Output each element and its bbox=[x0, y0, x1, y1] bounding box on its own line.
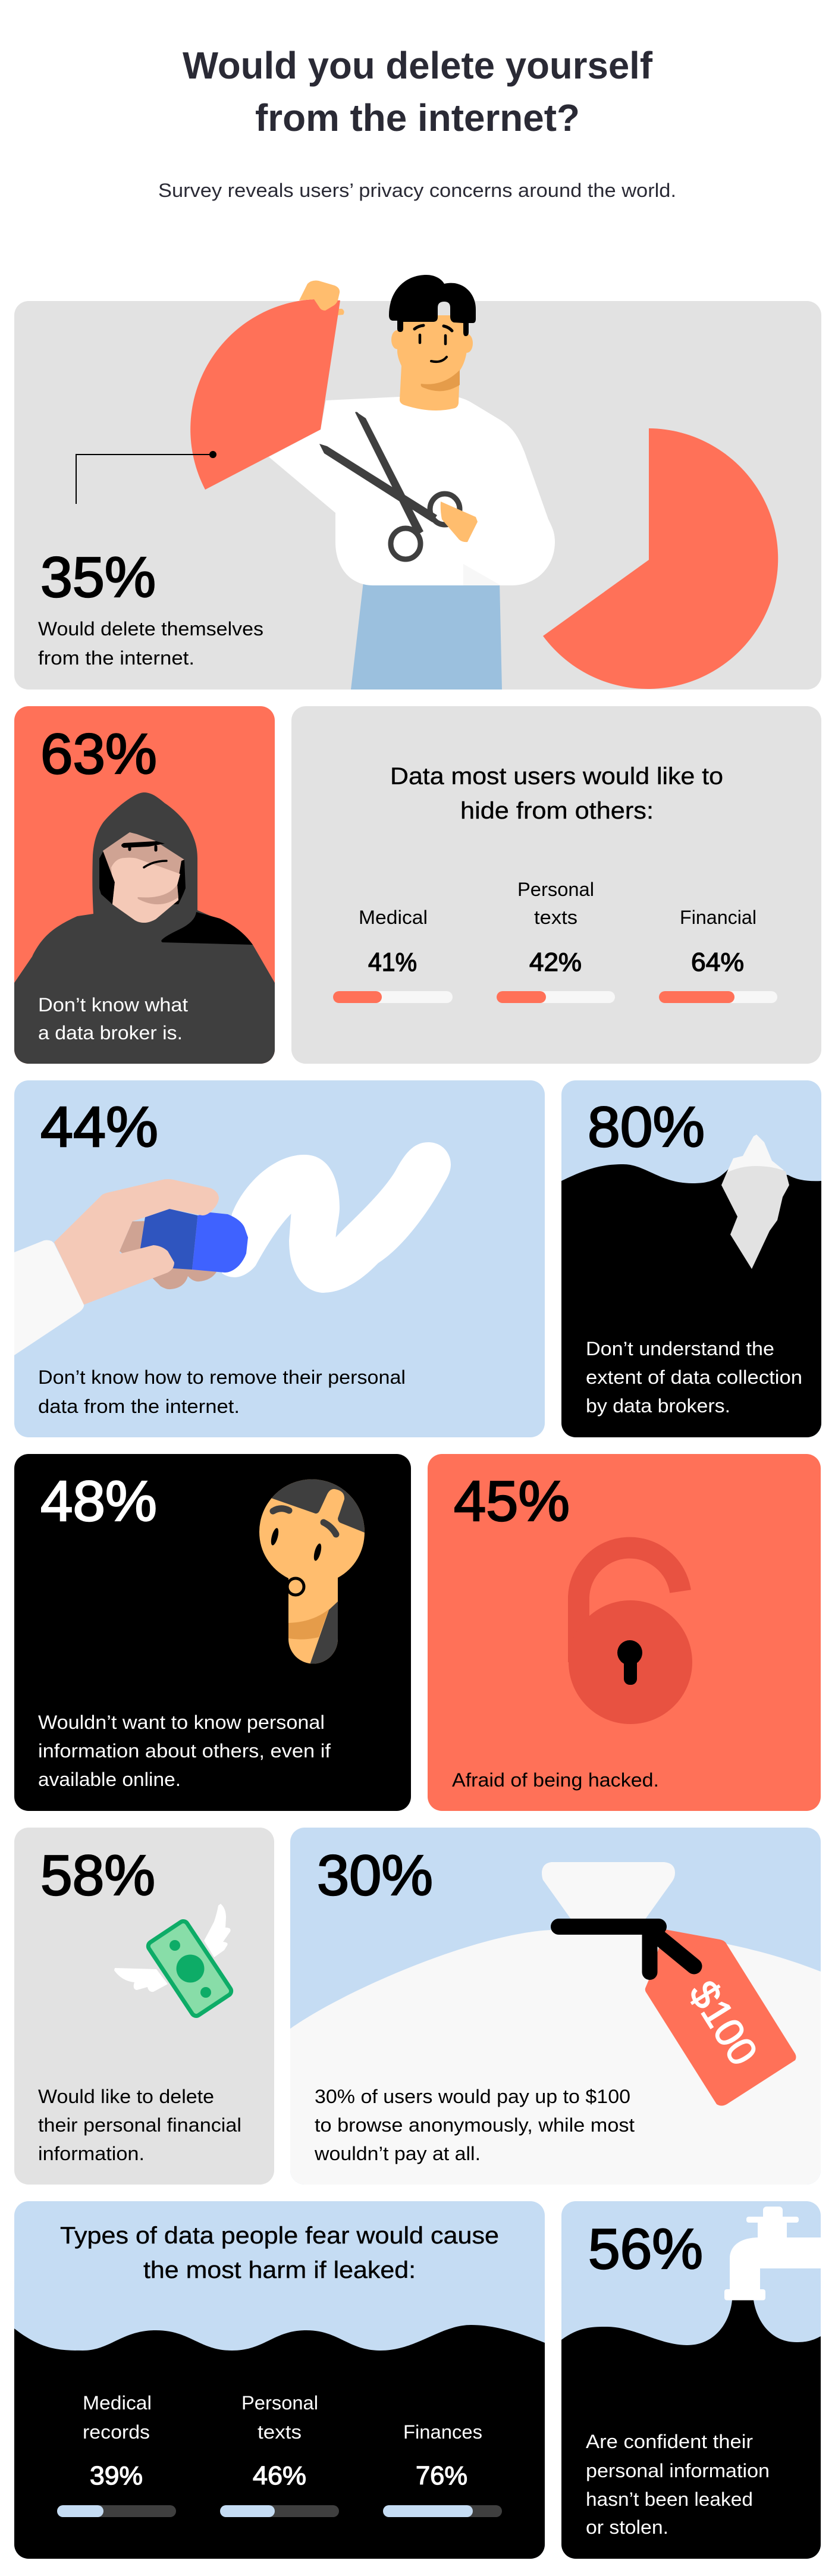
panel: 44% remove data bbox=[14, 1080, 545, 1437]
panel: 56% confident bbox=[561, 2201, 821, 2559]
stat 48%: 48% bbox=[40, 1469, 157, 1533]
bar: personal texts 46%: 46% bbox=[253, 2461, 306, 2490]
bar: personal texts 42%: Personal bbox=[517, 879, 594, 900]
bar: medical 41%: Medical bbox=[359, 907, 428, 928]
panel heading: Types of data people fear would cause bbox=[60, 2223, 499, 2249]
panel heading bbox=[390, 763, 723, 824]
stat 80%: 80% bbox=[588, 1095, 705, 1159]
panel: 48% personal information bbox=[14, 1454, 411, 1811]
stat text: Are confident their bbox=[586, 2431, 753, 2452]
stat text: Afraid of being hacked. bbox=[452, 1769, 659, 1791]
stat text: their personal financial bbox=[38, 2114, 241, 2136]
stat text bbox=[586, 1338, 802, 1417]
bar: personal texts 42%: 42% bbox=[529, 948, 582, 977]
stat text: a data broker is. bbox=[38, 1022, 183, 1043]
faucet bbox=[724, 2207, 821, 2300]
stat text: information. bbox=[38, 2143, 145, 2164]
stat text: Wouldn’t want to know personal bbox=[38, 1712, 325, 1733]
panel heading: the most harm if leaked: bbox=[143, 2257, 416, 2283]
pie remainder bbox=[543, 428, 778, 689]
panel: 58% financial information bbox=[14, 1828, 274, 2185]
stat text: information about others, even if bbox=[38, 1740, 331, 1762]
black water with drip bbox=[561, 2300, 821, 2559]
man with scissors bbox=[269, 275, 555, 690]
bar: medical records 39%: Medical bbox=[83, 2392, 152, 2414]
bar: financial 64%: 64% bbox=[691, 948, 744, 977]
panel: 63% data broker bbox=[14, 706, 275, 1064]
bar: personal texts 46%: Personal bbox=[241, 2392, 318, 2414]
sack tie bbox=[551, 1919, 694, 1972]
bar: personal texts 42% bbox=[497, 879, 615, 1003]
stat 44%: 44% bbox=[40, 1095, 158, 1159]
stat text: Don’t understand the bbox=[586, 1338, 774, 1359]
stat 35%: 35% bbox=[40, 546, 156, 609]
stat text: from the internet. bbox=[38, 647, 194, 669]
bar: finances 76%: Finances bbox=[403, 2421, 482, 2443]
keyhole face bbox=[256, 1475, 369, 1666]
black water bbox=[14, 2325, 545, 2559]
bar: medical 41%: 41% bbox=[368, 948, 417, 977]
stat text: data from the internet. bbox=[38, 1396, 240, 1417]
hand with eraser bbox=[14, 1179, 248, 1355]
bar: medical records 39% bbox=[57, 2392, 176, 2517]
bar: finances 76%: 76% bbox=[416, 2461, 467, 2490]
panel: types of data fear bbox=[14, 2201, 545, 2559]
title: from the internet? bbox=[255, 96, 580, 139]
eraser scribble bbox=[222, 1142, 451, 1293]
panel: 45% hacked bbox=[428, 1454, 821, 1811]
stat text: hasn’t been leaked bbox=[586, 2489, 753, 2510]
panel: 30% pay to browse bbox=[290, 1828, 821, 2185]
price tag bbox=[645, 1929, 796, 2106]
leader line bbox=[76, 451, 216, 504]
stat text: 30% of users would pay up to $100 bbox=[315, 2086, 630, 2107]
stat text: to browse anonymously, while most bbox=[315, 2114, 635, 2136]
stat text bbox=[38, 994, 188, 1043]
panel heading bbox=[60, 2223, 499, 2283]
stat text bbox=[314, 2086, 635, 2164]
bar: medical 41% bbox=[333, 907, 453, 1003]
stat 58%: 58% bbox=[40, 1844, 155, 1907]
stat text bbox=[38, 1367, 406, 1417]
stat text: Would delete themselves bbox=[38, 618, 263, 640]
bar: medical records 39%: 39% bbox=[90, 2461, 143, 2490]
stat text: extent of data collection bbox=[586, 1367, 802, 1388]
subtitle: Survey reveals users’ privacy concerns around the world. bbox=[158, 180, 676, 201]
flying banknote bbox=[114, 1904, 233, 2018]
stat text bbox=[38, 618, 263, 669]
stat text bbox=[38, 1712, 331, 1790]
price tag: $100 bbox=[680, 1973, 766, 2073]
stat text: wouldn’t pay at all. bbox=[314, 2143, 481, 2164]
bar: personal texts 46%: texts bbox=[258, 2421, 302, 2443]
stat text: available online. bbox=[38, 1769, 181, 1790]
title bbox=[183, 44, 653, 139]
bar: finances 76% bbox=[383, 2421, 502, 2517]
open padlock bbox=[569, 1548, 692, 1724]
stat text bbox=[586, 2431, 770, 2538]
hooded figure bbox=[14, 792, 275, 1064]
held pie slice bbox=[190, 299, 340, 490]
hand holding slice bbox=[299, 281, 340, 311]
bar: financial 64% bbox=[659, 907, 777, 1003]
stat text: or stolen. bbox=[586, 2517, 668, 2538]
stat text: Don’t know how to remove their personal bbox=[38, 1367, 406, 1388]
bar: personal texts 46% bbox=[220, 2392, 339, 2517]
stat 45%: 45% bbox=[454, 1469, 570, 1533]
iceberg bbox=[721, 1135, 789, 1269]
bar: medical records 39%: records bbox=[83, 2421, 150, 2443]
stat text: by data brokers. bbox=[586, 1395, 730, 1417]
stat text: Don’t know what bbox=[38, 994, 188, 1016]
stat 56%: 56% bbox=[588, 2217, 703, 2281]
black water bbox=[561, 1164, 821, 1437]
panel: 80% data collection bbox=[561, 1080, 821, 1437]
panel heading: hide from others: bbox=[460, 798, 654, 824]
bar: personal texts 42%: texts bbox=[534, 907, 577, 928]
panel: data users would hide bbox=[291, 706, 821, 1064]
bar: financial 64%: Financial bbox=[680, 907, 756, 928]
panel heading: Data most users would like to bbox=[390, 763, 723, 789]
stat text: Would like to delete bbox=[38, 2086, 214, 2107]
stat 30%: 30% bbox=[317, 1844, 433, 1907]
stat text: personal information bbox=[586, 2460, 770, 2481]
title: Would you delete yourself bbox=[183, 44, 653, 87]
money sack bbox=[290, 1862, 821, 2185]
stat 63%: 63% bbox=[40, 722, 157, 786]
stat text bbox=[38, 2086, 241, 2164]
panel: 35% would delete themselves bbox=[14, 275, 821, 690]
